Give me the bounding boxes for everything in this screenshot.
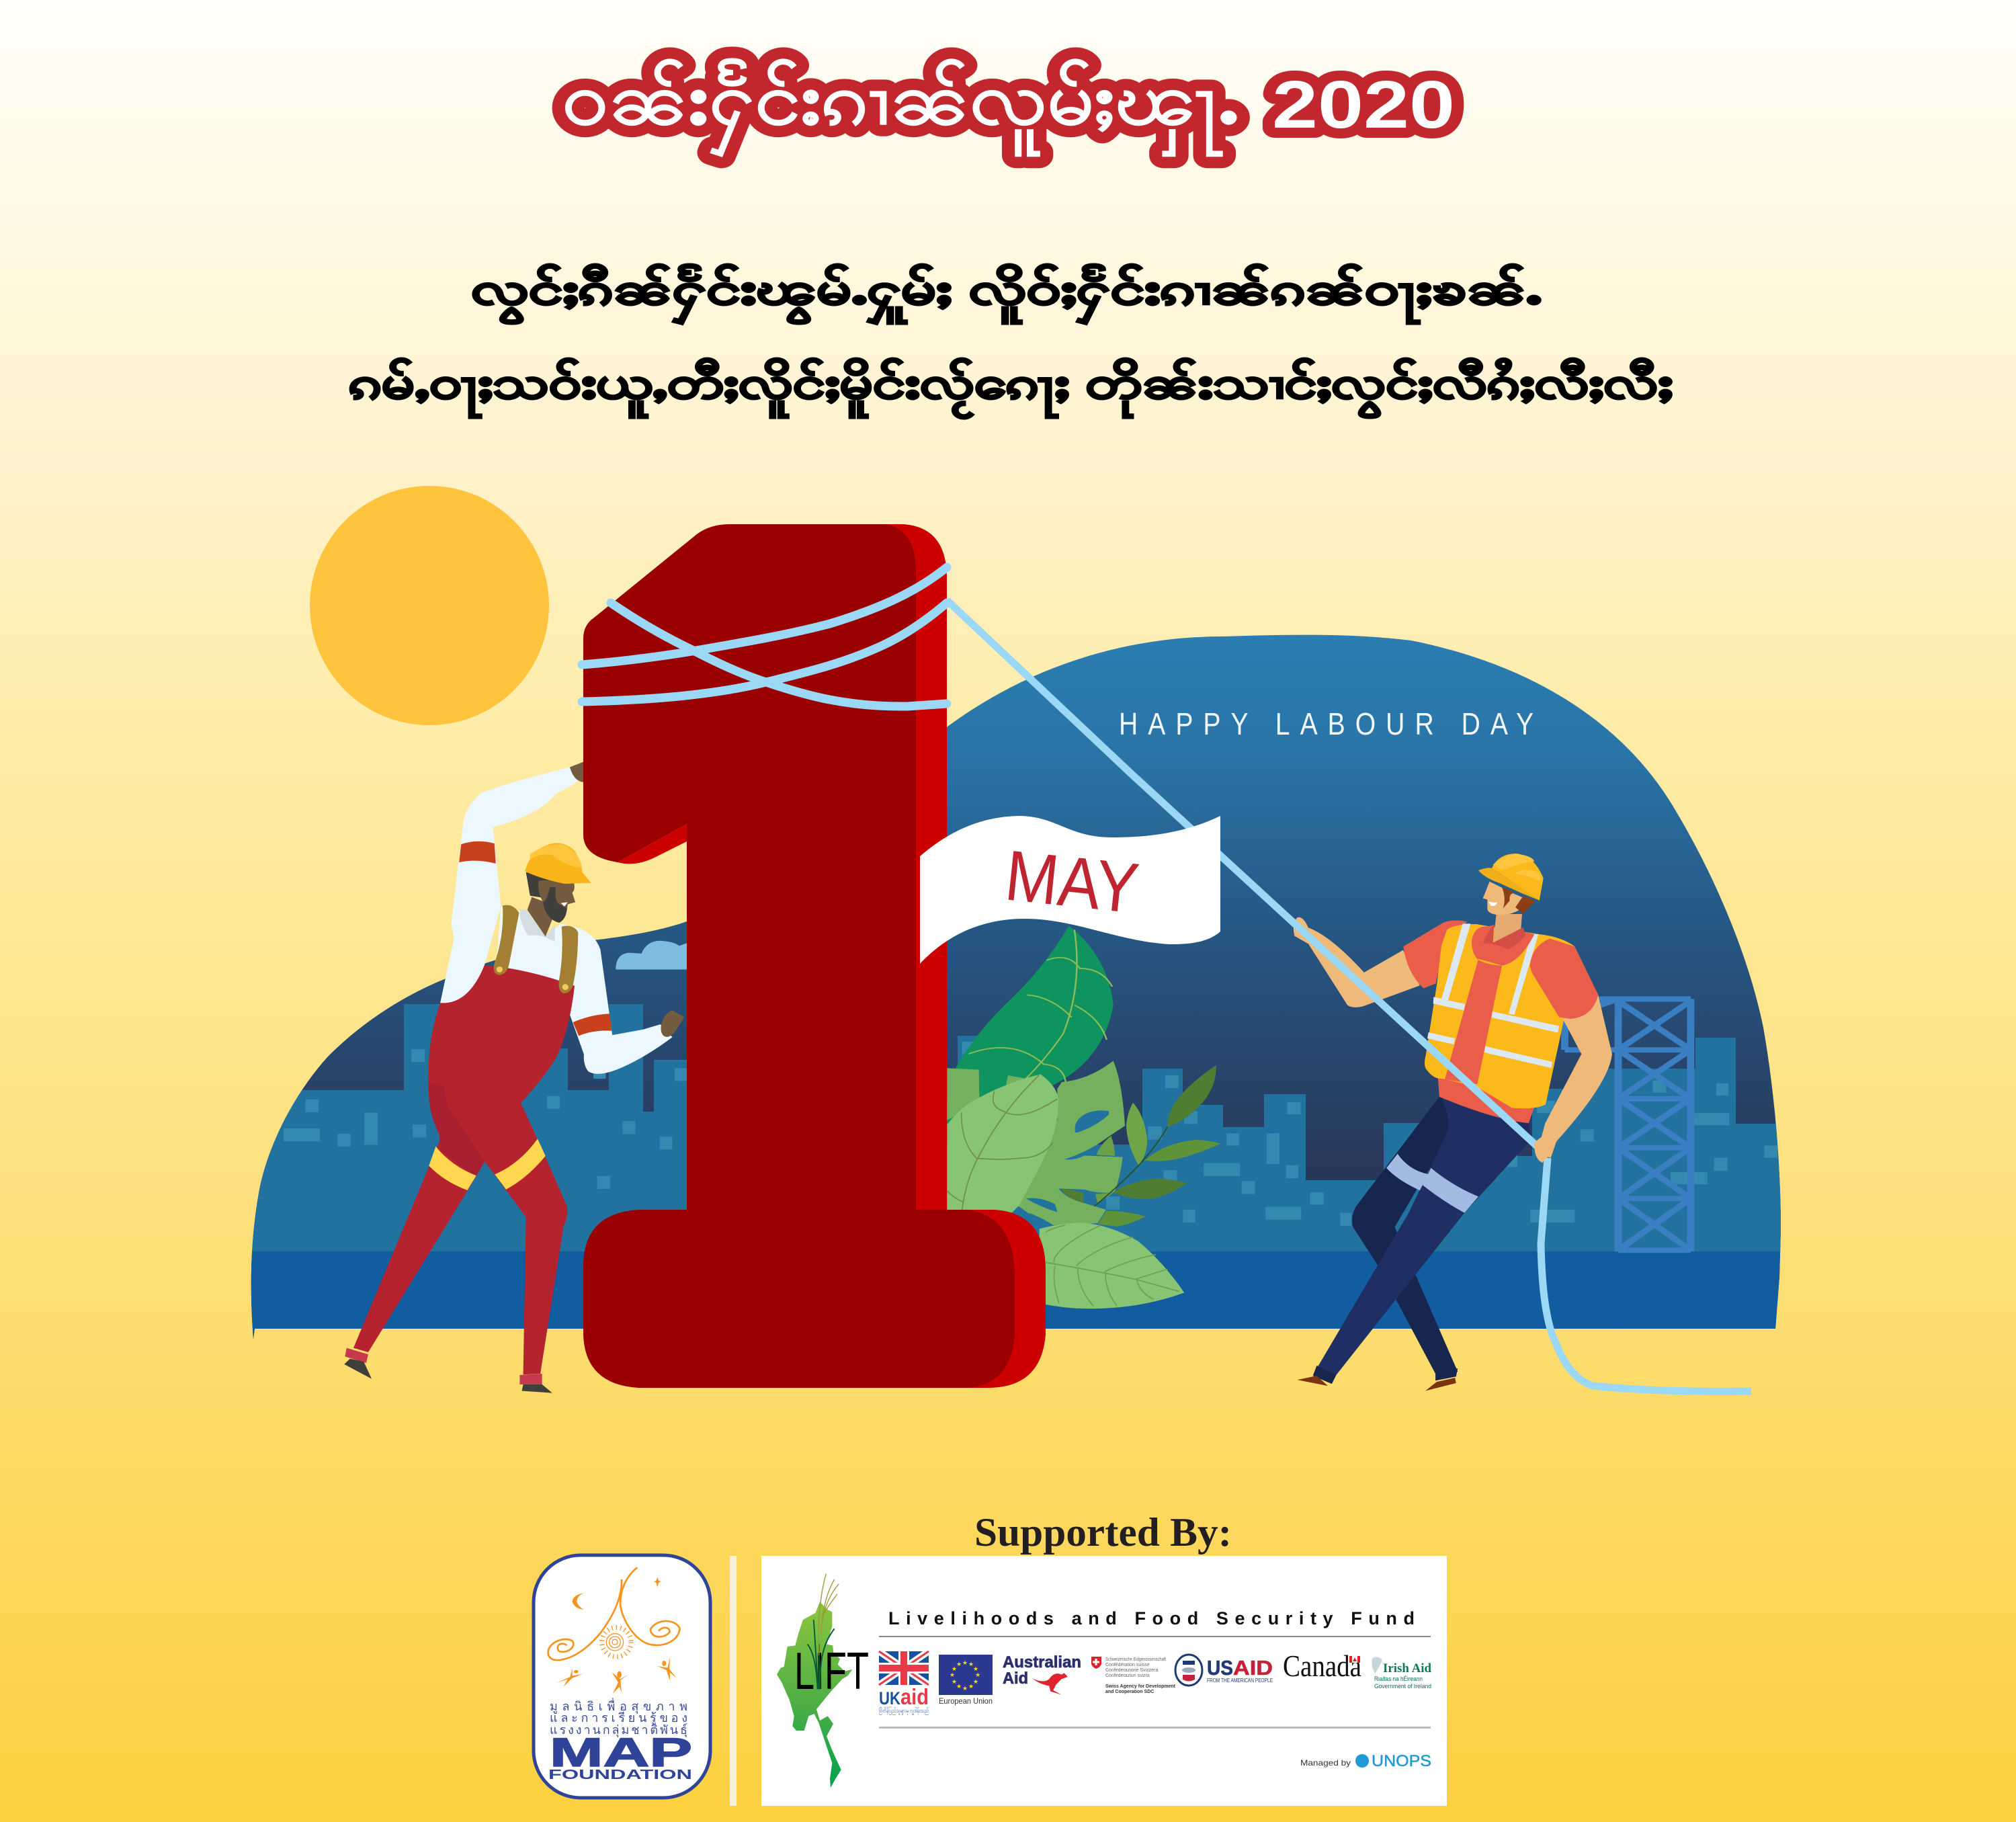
canada wordmark: Canada <box>1283 1649 1361 1683</box>
thai name: มูลนิธิเพื่อสุขภาพ <box>550 1698 687 1714</box>
left city buildings <box>242 1004 694 1265</box>
eu logo: ★ <box>968 1661 974 1668</box>
swiss logo: Confederazione Svizzera <box>1105 1668 1158 1673</box>
knee bands <box>1386 1154 1478 1213</box>
upper armband <box>459 841 496 864</box>
straps <box>494 905 578 993</box>
unops logo: UNOPS <box>1372 1752 1431 1770</box>
right city buildings <box>941 1036 1783 1259</box>
eu logo: ★ <box>973 1679 978 1686</box>
title: ဝၼ်းႁႅင်းၵၢၼ်လူမ်ႈၾႃႉ <box>562 57 1239 157</box>
myanmar map <box>777 1602 852 1788</box>
uk aid logo <box>879 1651 929 1715</box>
rice stalks <box>808 1574 839 1689</box>
australian aid logo: Aid <box>1003 1669 1028 1688</box>
swiss logo: and Cooperation SDC <box>1105 1690 1154 1694</box>
usaid logo: FROM THE AMERICAN PEOPLE <box>1207 1678 1273 1684</box>
eu logo: European Union <box>939 1696 993 1706</box>
unops logo: Managed by <box>1300 1758 1351 1768</box>
irish aid logo: Irish Aid <box>1383 1661 1431 1675</box>
front leg <box>1316 1099 1531 1375</box>
boots <box>345 1348 542 1384</box>
front arm <box>1294 917 1420 1007</box>
numeral 1 <box>583 524 1046 1388</box>
plant leaves <box>941 925 1221 1309</box>
swiss logo: Confederaziun svizra <box>1105 1673 1150 1678</box>
vest stripes <box>1427 923 1559 1068</box>
australian aid logo: Australian <box>1003 1653 1081 1671</box>
raised arm <box>440 767 578 1004</box>
monstera leaf <box>947 1061 1125 1225</box>
hand over rope <box>1534 1136 1549 1163</box>
eu logo: ★ <box>952 1666 957 1673</box>
may label: MAY <box>1002 836 1142 929</box>
shirt hem <box>1437 1058 1548 1123</box>
steel tower <box>1564 999 1691 1251</box>
neck and head <box>528 897 552 936</box>
left cloud <box>616 941 687 969</box>
uk aid logo: UK <box>879 1688 900 1708</box>
eu logo: ★ <box>952 1679 957 1686</box>
light leaf <box>947 1074 1058 1212</box>
may flag <box>920 816 1220 964</box>
upper body <box>1403 854 1598 1108</box>
eu logo: ★ <box>956 1684 962 1690</box>
swiss logo <box>1091 1657 1176 1694</box>
subtitle line 1: လွင်ႈၵီၼ်ႁႅင်းၽွမ်ႉႁူမ်ႈ လိူဝ်ႈႁႅင်းၵၢၼ်ၵၼ်ဝႃႈၶၼ်ႉ <box>471 263 1542 325</box>
rope around numeral <box>582 567 947 706</box>
usaid logo: US <box>1207 1656 1233 1680</box>
city dome scene <box>242 635 1788 1339</box>
helmet <box>525 843 591 884</box>
happy labour day text: HAPPY LABOUR DAY <box>1119 707 1534 742</box>
shoes <box>1313 1366 1458 1384</box>
head <box>1483 882 1530 915</box>
uk aid logo: aid <box>900 1684 929 1709</box>
irish aid logo <box>1372 1657 1431 1690</box>
scarf <box>1445 925 1534 1084</box>
eu logo: ★ <box>956 1661 962 1668</box>
sun <box>310 486 549 725</box>
dark green leaf <box>941 925 1114 1127</box>
overalls <box>353 965 575 1374</box>
water band <box>242 1251 1788 1332</box>
thai name <box>550 1698 687 1737</box>
dark face of numeral <box>583 524 1015 1388</box>
foundation wordmark: FOUNDATION <box>548 1768 692 1782</box>
collar <box>519 909 555 942</box>
lower armband <box>573 1013 612 1036</box>
torso shirt <box>496 907 673 1074</box>
map foundation logo <box>534 1555 710 1798</box>
eu logo <box>939 1655 993 1706</box>
subtitle line 2: ၵမ်ႇဝႃႈသဝ်းယူႇတီႈလိူင်ႈမိူင်းလႂ်ၵေႃႈ တိုၼ်းသၢင်ႈလွင်ႈလီၵႆႈလီႈလီႈ <box>349 357 1673 419</box>
eu logo: ★ <box>962 1660 968 1667</box>
thai name: และการเรียนรู้ของ <box>550 1711 687 1725</box>
right arm <box>1537 995 1612 1158</box>
swiss logo: Schweizerische Eidgenossenschaft <box>1105 1657 1166 1662</box>
foreground leaves <box>947 1061 1221 1309</box>
long rope <box>947 600 1751 1391</box>
eu logo: ★ <box>975 1672 980 1679</box>
unops logo <box>1300 1752 1431 1770</box>
swiss logo: Confédération suisse <box>1105 1663 1150 1667</box>
back leg <box>1352 1097 1464 1374</box>
back leaves <box>1095 1136 1115 1203</box>
irish aid logo: Rialtas na hÉireann <box>1374 1675 1423 1683</box>
branch <box>1094 1127 1167 1206</box>
swiss logo: Swiss Agency for Development <box>1105 1684 1176 1689</box>
usaid logo <box>1175 1655 1273 1686</box>
raised hand <box>570 760 589 782</box>
vest <box>1425 924 1574 1108</box>
left building windows <box>284 1049 687 1189</box>
fund name: Livelihoods and Food Security Fund <box>888 1608 1415 1628</box>
thai name: แรงงานกลุ่มชาติพันธุ์ <box>550 1723 687 1737</box>
eu logo: ★ <box>973 1666 978 1673</box>
helmet <box>1492 854 1544 901</box>
lift wordmark: LIFT <box>794 1641 869 1700</box>
map wordmark: MAP <box>550 1730 692 1775</box>
uk aid logo: ဗြိတိန်ပြည်သူများမှ လှူဒါန်းသည် <box>879 1706 929 1715</box>
divider bar <box>730 1556 737 1806</box>
orange emblem <box>548 1567 680 1694</box>
bottom leaf <box>1040 1223 1184 1309</box>
fist <box>661 1010 684 1037</box>
neck <box>1493 914 1522 943</box>
eu logo: ★ <box>968 1684 974 1690</box>
left worker <box>344 760 684 1393</box>
yellow knee bands <box>429 1138 546 1190</box>
title <box>562 57 1455 157</box>
irish aid logo: Government of Ireland <box>1374 1683 1431 1690</box>
right building windows <box>962 1042 1777 1226</box>
supported by heading: Supported By: <box>974 1510 1232 1555</box>
legs and arms <box>1294 917 1612 1391</box>
left sleeve <box>1403 921 1467 989</box>
right sleeve <box>1530 939 1598 1019</box>
eu logo: ★ <box>962 1686 968 1692</box>
usaid logo: AID <box>1233 1656 1273 1680</box>
right worker <box>1294 854 1612 1391</box>
lift panel <box>761 1556 1447 1806</box>
eu logo: ★ <box>950 1672 955 1679</box>
title: 2020 <box>1272 67 1455 142</box>
australian aid logo <box>1003 1653 1081 1695</box>
red side of numeral <box>840 524 1046 1388</box>
